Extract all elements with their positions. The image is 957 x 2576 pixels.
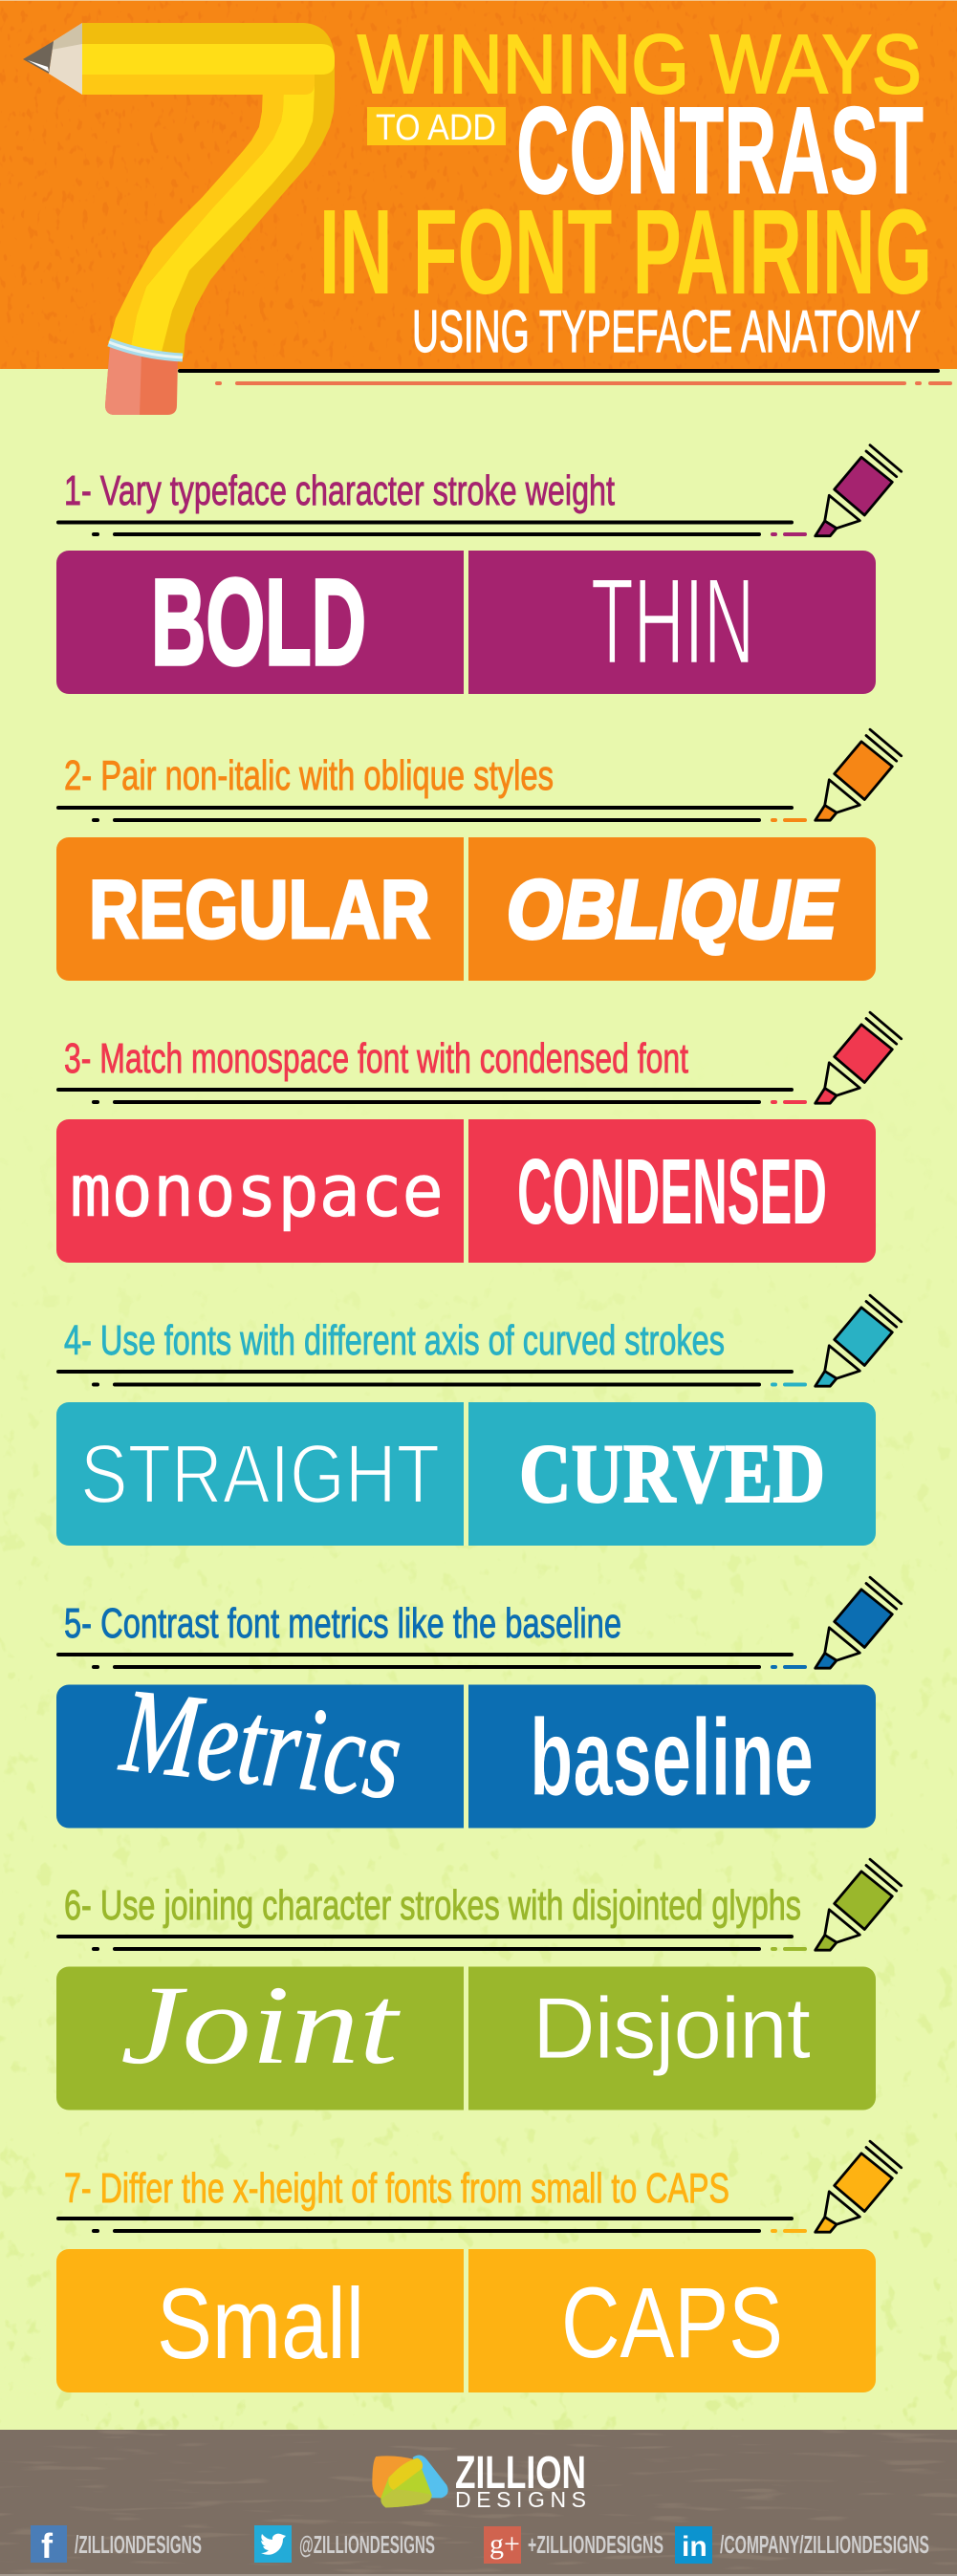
rule lines 1 — [56, 520, 807, 536]
label: caps: CAPS — [561, 2267, 783, 2379]
section 6: joining strokes — [56, 1859, 902, 2111]
icon: marker 1 — [816, 445, 902, 536]
icon: facebook: f — [41, 2526, 54, 2565]
heading 7: 7- Differ the x-height of fonts from small to CAPS — [64, 2165, 729, 2212]
facebook handle: /ZILLIONDESIGNS — [75, 2530, 202, 2559]
rule lines 2 — [56, 806, 807, 822]
label: joint: Joint — [120, 1962, 402, 2088]
icon: pencil shaped as number 7 — [23, 23, 335, 415]
section 7: x-height — [56, 2141, 902, 2392]
icon: marker 6 — [816, 1859, 902, 1950]
panel 2 — [56, 837, 876, 981]
heading 3: 3- Match monospace font with condensed font — [64, 1035, 688, 1082]
label: curved: CURVED — [519, 1428, 825, 1521]
section 4: curved strokes — [56, 1295, 902, 1546]
icon: marker 5 — [816, 1577, 902, 1668]
google plus handle: +ZILLIONDESIGNS — [528, 2530, 663, 2559]
icon: marker 4 — [816, 1295, 902, 1386]
label: bold: BOLD — [151, 554, 366, 691]
label: baseline: baseline — [530, 1698, 814, 1819]
logo subline: DESIGNS — [455, 2487, 586, 2512]
label: straight: STRAIGHT — [80, 1428, 440, 1521]
label: oblique: OBLIQUE — [507, 864, 838, 956]
panel 6 — [56, 1962, 876, 2111]
icon: google plus — [484, 2526, 521, 2564]
heading 1: 1- Vary typeface character stroke weight — [64, 467, 615, 514]
social: twitter — [254, 2525, 435, 2563]
header rule lines — [178, 369, 952, 385]
rule lines 7 — [56, 2217, 807, 2233]
logo wordmark: ZILLION — [455, 2448, 586, 2499]
section 2: oblique — [56, 729, 902, 981]
label: disjoint: Disjoint — [533, 1981, 811, 2077]
title tag: to add: TO ADD — [376, 108, 496, 148]
icon: marker 2 — [816, 729, 902, 820]
icon: facebook — [31, 2525, 67, 2565]
icon: marker 7 — [816, 2141, 902, 2232]
panel 1 — [56, 551, 876, 694]
pencil metal band — [109, 342, 183, 357]
title — [319, 18, 932, 365]
icon: linkedin — [675, 2526, 712, 2564]
pencil lead — [23, 41, 54, 74]
rule lines 6 — [56, 1935, 807, 1951]
pencil eraser — [105, 346, 178, 415]
rule lines 5 — [56, 1653, 807, 1669]
label: regular: REGULAR — [89, 864, 430, 956]
logo mark — [372, 2455, 448, 2507]
panel 5 — [56, 1664, 876, 1828]
section 5: baseline — [56, 1577, 902, 1828]
label: small: Small — [157, 2268, 364, 2380]
label: monospace: monospace — [70, 1148, 444, 1233]
rule lines 3 — [56, 1088, 807, 1104]
section 3: monospace and condensed — [56, 1012, 902, 1263]
label: metrics: Metrics — [115, 1664, 407, 1825]
label: thin: THIN — [591, 553, 754, 690]
heading 2: 2- Pair non-italic with oblique styles — [64, 752, 554, 799]
icon: marker 3 — [816, 1012, 902, 1103]
panel 3 — [56, 1119, 876, 1263]
icon: linkedin: in — [682, 2531, 707, 2563]
header band — [0, 0, 957, 369]
icon: twitter bird — [254, 2525, 292, 2563]
social: google plus — [484, 2526, 663, 2564]
social: linkedin — [675, 2526, 929, 2564]
footer band — [0, 2430, 957, 2576]
pencil wood tip — [49, 23, 82, 95]
heading 4: 4- Use fonts with different axis of curved strokes — [64, 1317, 725, 1364]
social: facebook — [31, 2525, 202, 2565]
icon: google plus: g+ — [489, 2528, 520, 2560]
rule lines 4 — [56, 1370, 807, 1386]
heading 5: 5- Contrast font metrics like the baseline — [64, 1600, 621, 1647]
panel 4 — [56, 1402, 876, 1546]
section 1: stroke weight — [56, 445, 902, 694]
twitter handle: @ZILLIONDESIGNS — [299, 2530, 435, 2559]
panel 7 — [56, 2249, 876, 2392]
logo: zillion designs — [372, 2448, 586, 2512]
